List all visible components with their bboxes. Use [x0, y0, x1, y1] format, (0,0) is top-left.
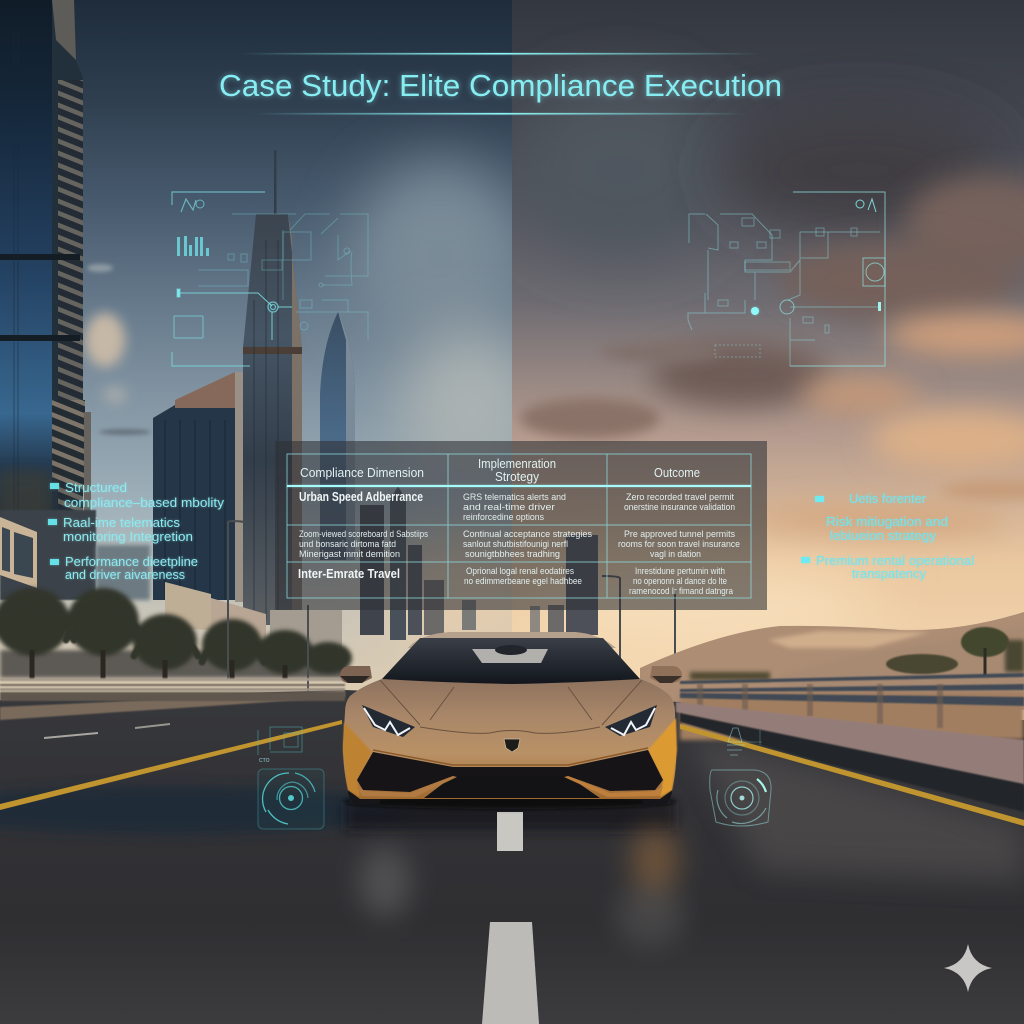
table row: zone: sanlout shutbistifounigi nerfl	[463, 539, 568, 550]
small schematic	[727, 728, 762, 755]
road markings	[0, 720, 1024, 1024]
table row: inter-emirate travel	[298, 566, 734, 597]
tower: lower left dark block	[0, 510, 150, 600]
table row: urban speed: and real-time driver	[463, 502, 555, 513]
icon: four-point sparkle	[944, 944, 992, 992]
street lamps	[228, 521, 675, 692]
HUD fan module	[863, 258, 885, 286]
table row: inter-emirate travel: Oprional logal renal eodatires	[466, 566, 574, 577]
HUD bar chart	[177, 236, 209, 256]
bullet item 3: Premium rental operational	[816, 553, 974, 568]
car windshield	[382, 638, 640, 684]
bullet item 1: Uetis forenter	[849, 491, 927, 506]
table row: zone: Zoom-viewed scoreboard d Sabstiips	[299, 529, 428, 540]
table grid	[287, 454, 751, 598]
table row: zone: Continual acceptance strategies	[463, 529, 592, 540]
HUD terminal	[878, 302, 881, 311]
car grille	[357, 748, 663, 798]
HUD circuit traces	[198, 214, 368, 340]
windshield reflection	[472, 649, 548, 663]
HUD top bracket	[790, 192, 885, 366]
bullet item 3: Performance dieetpline	[65, 554, 198, 569]
title bottom rule	[255, 113, 745, 114]
table header text: Strotegy	[495, 470, 540, 484]
table header text: Compliance Dimension	[300, 466, 424, 480]
HUD status card	[174, 316, 203, 338]
table panel: compliance overview	[275, 441, 767, 610]
HUD circuit main line	[180, 293, 292, 340]
car emblem	[504, 739, 520, 752]
palm trees and roadside: left	[0, 588, 352, 680]
bullet list: right benefits	[801, 491, 974, 581]
table header text	[300, 457, 700, 484]
table row: zone: Minerigast mmit demition	[299, 549, 400, 560]
bullet item 3	[50, 554, 198, 582]
tower: central spire	[243, 150, 302, 625]
bullet item 3: and driver aivareness	[65, 567, 185, 582]
bullet item 2	[48, 515, 193, 544]
table header text: Outcome	[654, 466, 700, 480]
HUD glowing node	[751, 307, 759, 315]
small schematic	[258, 727, 302, 755]
HUD gear node	[780, 300, 794, 314]
tower: far-left glass skyscraper	[0, 0, 91, 530]
bullet item 2: Raal-ime telematics	[63, 515, 180, 530]
table row: urban speed: GRS telematics alerts and	[463, 492, 566, 503]
car: sports car front view	[340, 632, 682, 809]
HUD logo glyph	[856, 199, 876, 212]
gauge frame	[258, 769, 324, 829]
distant skyline behind table	[270, 486, 598, 660]
bullet item 1: compliance–based mbolity	[64, 495, 225, 510]
gauge label: CTO	[259, 758, 270, 764]
HUD node terminal	[177, 289, 180, 297]
HUD panel: left schematic	[172, 192, 368, 366]
HUD fan rotor	[866, 263, 884, 281]
bullet item 1: Structured	[65, 480, 127, 495]
table row: urban speed: reinforcedine options	[463, 512, 544, 523]
headlight: right	[605, 705, 657, 736]
HUD small modules	[715, 218, 857, 357]
title top rule	[240, 53, 760, 54]
table header text: Implemenration	[478, 457, 556, 471]
table row: zone: rooms for soon travel insurance	[618, 539, 740, 550]
HUD circuit traces	[689, 214, 880, 300]
car tyres	[347, 780, 673, 804]
hood creases	[380, 680, 642, 733]
HUD corner brackets	[172, 192, 265, 366]
table row: inter-emirate travel: Inrestidune pertumin with	[635, 566, 725, 577]
car side highlights	[343, 718, 677, 797]
HUD logo ring	[196, 200, 204, 208]
right sidewalk and curb	[676, 702, 1024, 812]
table row: zone: vagl in dation	[650, 549, 701, 560]
car roof	[408, 632, 616, 648]
bullet item 3	[801, 553, 974, 581]
table header rule	[287, 485, 751, 487]
bullet list: left benefits	[48, 480, 225, 582]
table row: urban speed: onerstine insurance validation	[624, 502, 735, 513]
road HUD: right gauge	[710, 728, 771, 826]
gauge frame	[710, 770, 771, 826]
skyline: left city towers	[0, 0, 598, 660]
car mirrors	[340, 666, 682, 683]
desert dunes and palms: right	[640, 612, 1024, 710]
table row: inter-emirate travel: no edimmerbeane egel hadhbee	[464, 576, 582, 587]
table row: urban speed	[299, 490, 735, 523]
bullet item 2: monitoring Integretion	[63, 529, 193, 544]
table row: urban speed: Zero recorded travel permit	[626, 492, 734, 503]
table row: zone: sounigtbbhees tradhing	[465, 549, 560, 560]
bullet item 2	[826, 514, 948, 543]
bullet item 2: lebiueion strategy	[830, 528, 937, 543]
HUD logo glyph	[181, 199, 196, 212]
table row: inter-emirate travel: Inter-Emrate Travel	[298, 567, 400, 581]
table row: inter-emirate travel: ramenocod Ir fimand datngra	[629, 586, 734, 597]
car body	[343, 679, 676, 799]
car shadow	[344, 795, 676, 809]
bullet item 1	[815, 491, 927, 506]
HUD panel: right schematic	[688, 192, 885, 366]
gauge rings	[717, 779, 766, 823]
HUD spiral node	[268, 302, 278, 312]
table row: zone: Pre approved tunnel permits	[624, 529, 735, 540]
table row: zone	[299, 529, 740, 560]
table row: inter-emirate travel: no openonn al dance do lte	[633, 576, 727, 587]
background: right sunset sky with clouds	[510, 0, 1024, 720]
table backdrop	[275, 441, 767, 610]
bullet item 3: transpatency	[852, 566, 926, 581]
background: left daytime sky	[0, 0, 512, 700]
table row: urban speed: Urban Speed Adberrance	[299, 490, 423, 504]
tower: curved blue spire	[320, 312, 355, 560]
low-rise beige buildings	[0, 517, 266, 645]
road HUD: left gauge	[258, 727, 324, 829]
bullet item 2: Risk mitiugation and	[826, 514, 948, 529]
table row: zone: und bonsaric dirtoma fatd	[299, 539, 396, 550]
title text: Case Study: Elite Compliance Execution	[219, 68, 782, 103]
tower: mid glass building	[153, 372, 243, 602]
bullet item 1	[50, 480, 225, 510]
road surface	[0, 690, 1024, 1024]
headlight: left	[362, 705, 415, 737]
gauge rings	[263, 773, 315, 824]
guard rails	[0, 673, 1024, 740]
